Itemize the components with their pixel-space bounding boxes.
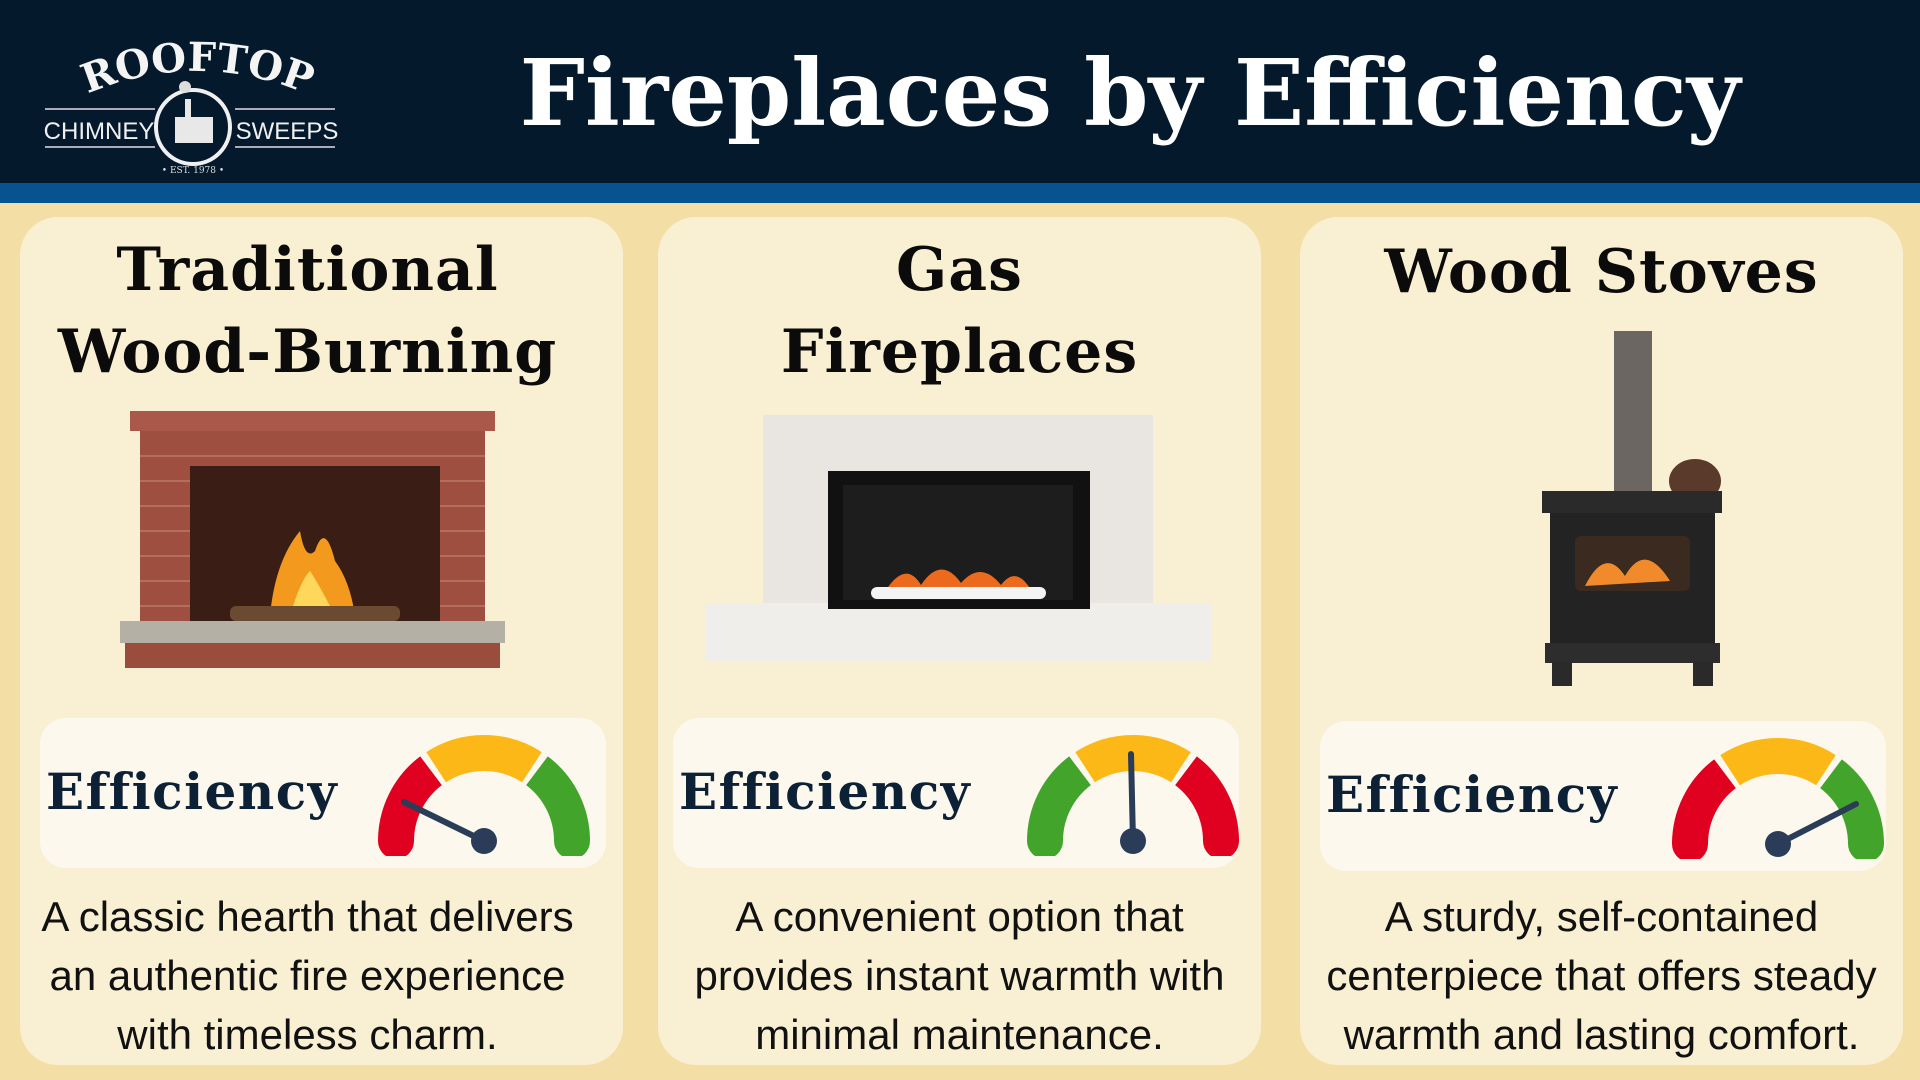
heading: Gas (896, 235, 1023, 305)
efficiency box (673, 718, 1239, 868)
image: brick fireplace (120, 411, 505, 668)
description: minimal maintenance. (755, 1011, 1164, 1058)
description (41, 893, 574, 1058)
description: an authentic fire experience (50, 952, 566, 999)
description: A convenient option that (735, 893, 1184, 940)
description: centerpiece that offers steady (1326, 952, 1877, 999)
panel: gas fireplaces (658, 217, 1261, 1065)
title: Fireplaces by Efficiency (520, 39, 1740, 147)
logo: SWEEPS (236, 118, 338, 145)
logo: CHIMNEY (44, 118, 154, 145)
heading: Fireplaces (781, 317, 1138, 387)
efficiency box: Efficiency (679, 762, 971, 821)
gauge: low (378, 735, 590, 856)
description: A sturdy, self-contained (1385, 893, 1818, 940)
efficiency box (1320, 721, 1886, 871)
panel: wood stoves (1300, 217, 1903, 1065)
description: warmth and lasting comfort. (1344, 1011, 1859, 1058)
description (695, 893, 1224, 1058)
description: with timeless charm. (117, 1011, 498, 1058)
gauge: high (1672, 738, 1884, 859)
image: wood stove (1542, 331, 1722, 686)
efficiency box: Efficiency (1326, 765, 1618, 824)
description (1326, 893, 1877, 1058)
heading: Wood-Burning (58, 317, 557, 387)
gauge: medium (1027, 735, 1239, 856)
panel: traditional wood-burning (20, 217, 623, 1065)
heading (781, 235, 1138, 387)
efficiency box: Efficiency (46, 762, 338, 821)
header bar (0, 0, 1920, 183)
heading: Wood Stoves (1384, 237, 1819, 307)
description: provides instant warmth with (695, 952, 1224, 999)
description: A classic hearth that delivers (41, 893, 574, 940)
heading: Traditional (116, 235, 499, 305)
efficiency box (40, 718, 606, 868)
image: gas fireplace (706, 415, 1211, 661)
logo: • EST. 1978 • (162, 166, 224, 176)
logo (44, 42, 338, 176)
logo: ROOFTOP (79, 42, 314, 93)
heading (57, 235, 557, 387)
